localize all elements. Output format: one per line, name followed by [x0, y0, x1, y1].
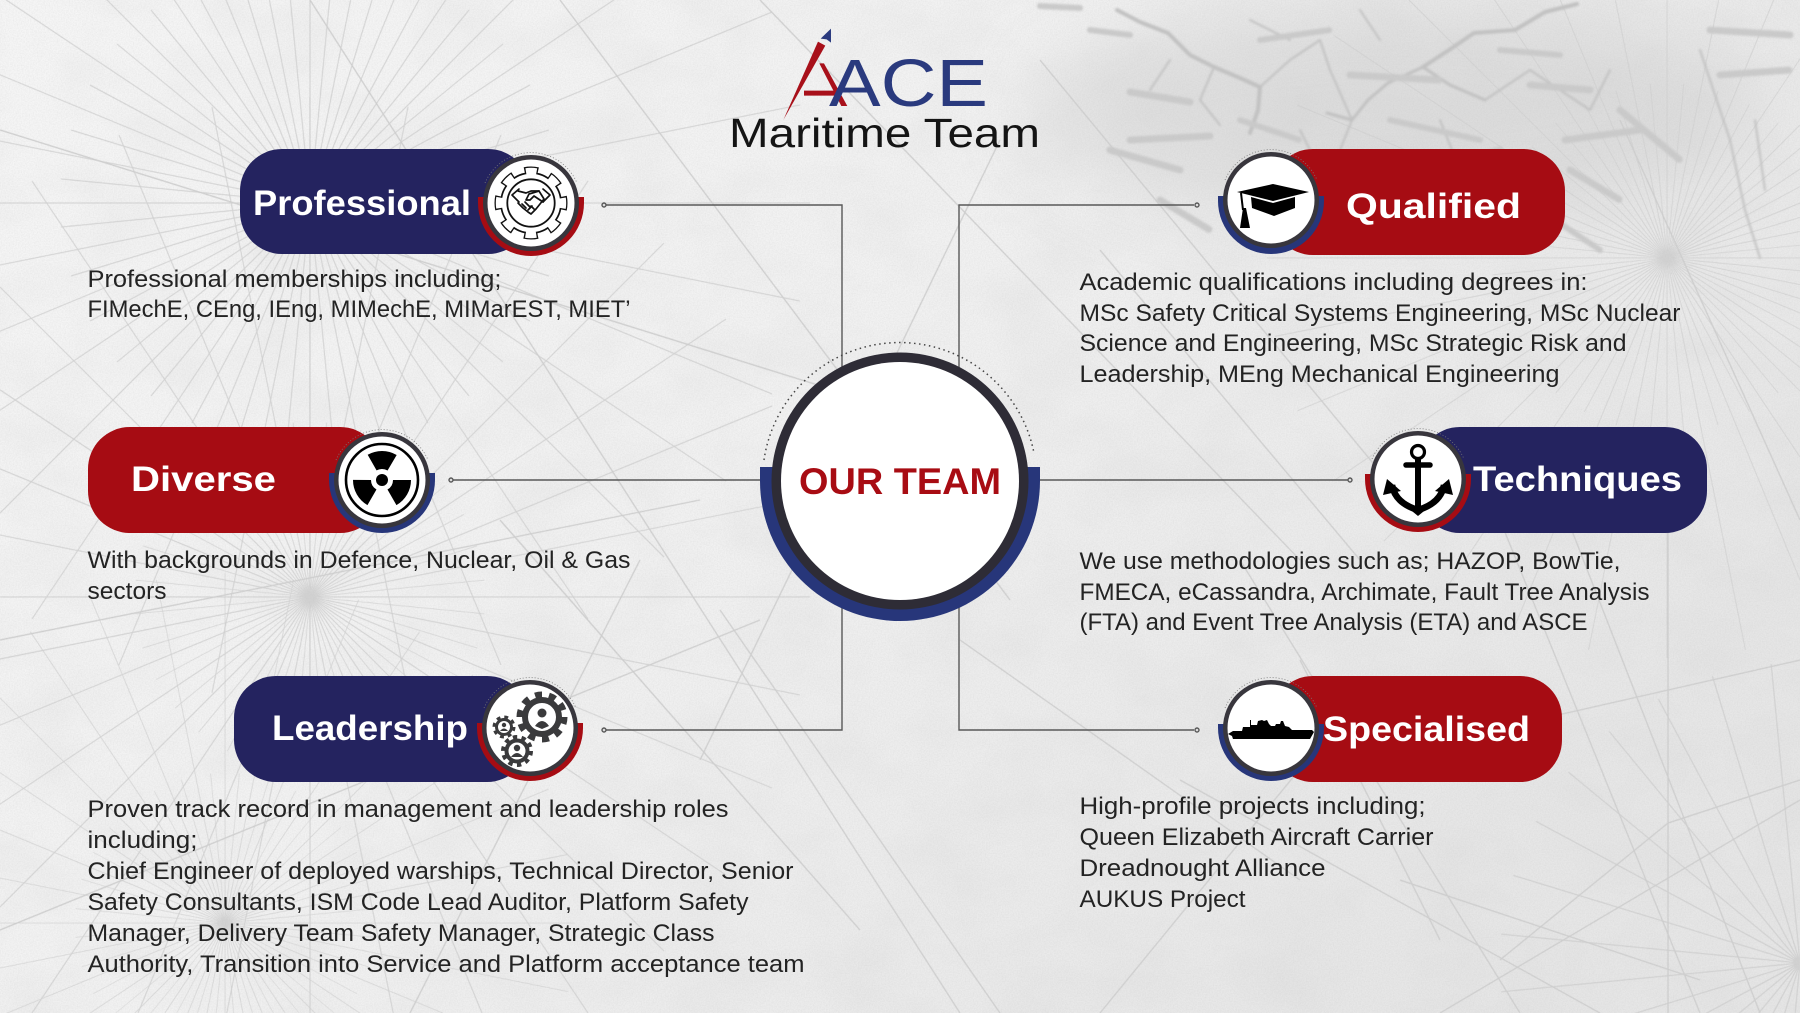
heading: Techniques	[1473, 460, 1682, 499]
description	[88, 547, 630, 605]
description	[1080, 548, 1650, 636]
heading: Specialised	[1323, 710, 1530, 749]
description: FMECA, eCassandra, Archimate, Fault Tree Analysis	[1080, 579, 1650, 606]
description: Dreadnought Alliance	[1080, 855, 1326, 882]
pill	[1271, 149, 1565, 255]
description	[88, 266, 630, 323]
panel: Professional	[88, 149, 630, 323]
logo: AACE compass mark	[783, 29, 988, 121]
icon: warship silhouette	[1218, 678, 1324, 781]
heading: Qualified	[1346, 187, 1521, 226]
description: AUKUS Project	[1080, 886, 1246, 913]
central hub: OUR TEAM: OUR TEAM	[799, 461, 1001, 502]
description: sectors	[88, 578, 166, 605]
description: Safety Consultants, ISM Code Lead Auditor, Platform Safety	[88, 889, 748, 916]
central hub: OUR TEAM	[760, 343, 1040, 621]
description: High-profile projects including;	[1080, 793, 1426, 820]
description: Proven track record in management and leadership roles	[88, 796, 728, 823]
panel: Specialised	[1080, 676, 1562, 913]
panel: Techniques	[1080, 427, 1707, 636]
description: With backgrounds in Defence, Nuclear, Oil & Gas	[88, 547, 630, 574]
description	[1080, 793, 1434, 913]
logo: AACE compass mark: ACE	[829, 46, 988, 121]
description: FIMechE, CEng, IEng, MIMechE, MIMarEST, MIET’	[88, 296, 630, 323]
title: Maritime Team: Maritime Team	[729, 110, 1040, 156]
description: Science and Engineering, MSc Strategic Risk and	[1080, 330, 1626, 357]
description	[1080, 269, 1680, 388]
pill	[1271, 676, 1562, 782]
heading: Diverse	[131, 460, 276, 499]
description: We use methodologies such as; HAZOP, BowTie,	[1080, 548, 1620, 575]
description: MSc Safety Critical Systems Engineering, MSc Nuclear	[1080, 300, 1680, 327]
heading: Leadership	[272, 709, 468, 748]
description: including;	[88, 827, 198, 854]
pill	[88, 427, 382, 533]
icon: radiation symbol	[329, 430, 435, 533]
icon: three gears with people	[477, 678, 583, 781]
description: Leadership, MEng Mechanical Engineering	[1080, 361, 1560, 388]
description: Queen Elizabeth Aircraft Carrier	[1080, 824, 1434, 851]
panel: Qualified	[1080, 149, 1680, 388]
heading: Professional	[253, 184, 471, 223]
description: Academic qualifications including degrees in:	[1080, 269, 1588, 296]
pill	[240, 149, 530, 254]
icon: gear with handshake	[478, 153, 584, 256]
panel: Leadership	[88, 676, 804, 978]
description: Authority, Transition into Service and Platform acceptance team	[88, 951, 804, 978]
icon: anchor	[1365, 429, 1471, 532]
icon: graduation cap	[1218, 150, 1324, 254]
description: Chief Engineer of deployed warships, Technical Director, Senior	[88, 858, 794, 885]
connector lines	[449, 203, 1352, 732]
panel: Diverse	[88, 427, 630, 605]
description	[88, 796, 804, 978]
pill	[1418, 427, 1707, 533]
description: Manager, Delivery Team Safety Manager, Strategic Class	[88, 920, 714, 947]
description: Professional memberships including;	[88, 266, 502, 293]
pill	[234, 676, 529, 782]
description: (FTA) and Event Tree Analysis (ETA) and ASCE	[1080, 609, 1588, 636]
